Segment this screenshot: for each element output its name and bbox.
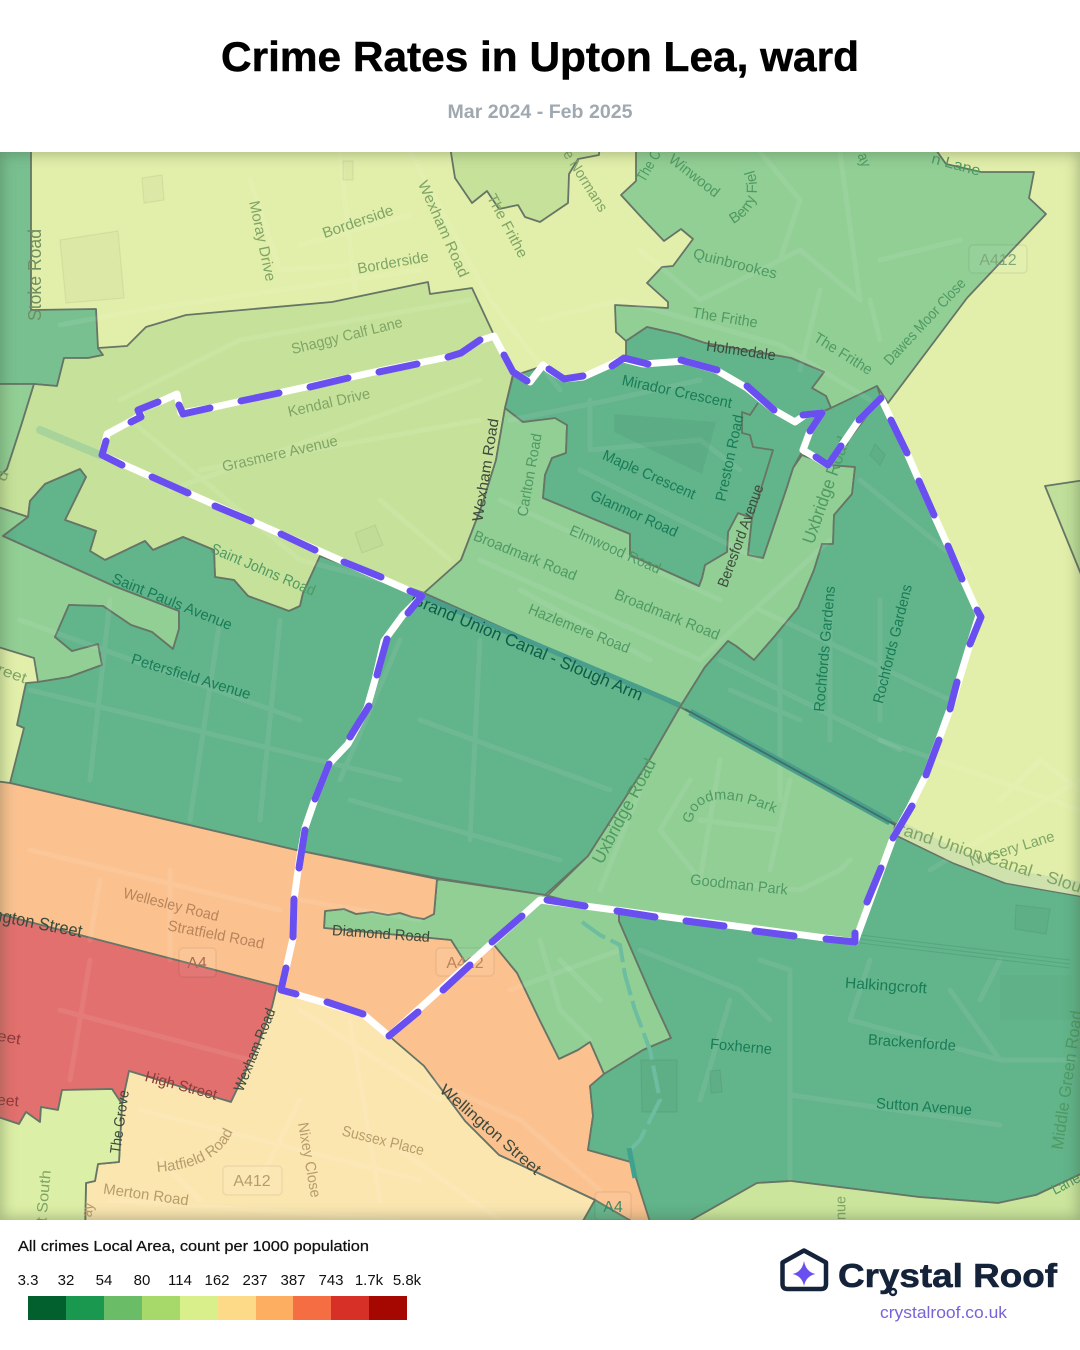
legend tick labels: 743 (318, 1272, 344, 1289)
zone: central-west dark green (3, 469, 680, 895)
legend tick labels (18, 1272, 422, 1289)
street and road name labels: Elmwood Road (567, 522, 663, 578)
street and road name labels: ay (854, 151, 875, 170)
street and road name labels: t South (33, 1169, 55, 1223)
zone: small wedge by Uxbridge Road (803, 386, 881, 465)
legend tick labels: 114 (168, 1272, 192, 1289)
street and road name labels: Preston Road (713, 413, 747, 503)
street and road name labels: Beresford Avenue (715, 482, 767, 590)
street and road name labels: rand Union Canal - Slou (896, 819, 1080, 897)
street and road name labels: e Normans (559, 147, 611, 215)
railway lines (860, 935, 1070, 968)
logo y-key ring (890, 1289, 896, 1295)
street and road name labels: The Frithe (691, 304, 759, 332)
street and road name labels: The C (633, 147, 665, 185)
legend colour bar (28, 1296, 407, 1320)
zone: High Street red (0, 913, 277, 1124)
street and road name labels: Mirador Crescent (620, 372, 734, 412)
street and road name labels: Kendal Drive (286, 385, 372, 421)
zone: Shaggy Calf and Grasmere (0, 282, 513, 611)
ward boundary: white casing and purple dashes (102, 336, 981, 1036)
street and road name labels: Saint Pauls Avenue (109, 570, 235, 634)
street and road name labels: Quinbrookes (691, 245, 779, 283)
legend tick labels: 80 (134, 1272, 150, 1289)
road number shields: A412 (446, 955, 484, 972)
legend tick labels: 237 (242, 1272, 268, 1289)
logo: house icon with star (782, 1250, 826, 1289)
street and road name labels: Broadmark Road (471, 528, 579, 584)
street and road name labels: Saint Johns Road (208, 540, 318, 600)
street and road name labels: The Frithe (483, 191, 531, 261)
road number shields (179, 245, 1027, 1220)
street and road name labels: High Street (143, 1068, 220, 1104)
street and road name labels: Stoke Road (25, 229, 45, 321)
street and road name labels: ay (78, 1201, 98, 1218)
street and road name labels: Berry Fiel (728, 170, 757, 224)
street and road name labels: nue (832, 1196, 850, 1220)
zone: Goodman Park mid-green (545, 707, 895, 942)
legend tick labels: 5.8k (393, 1272, 422, 1289)
legend tick labels: 162 (204, 1272, 230, 1289)
zone: Broadmark mid-green (424, 408, 855, 707)
street and road name labels: Merton Road (102, 1181, 190, 1209)
zone: top-middle Frithe fragment (450, 152, 600, 223)
zone: Preston Road internal boundary (742, 403, 773, 518)
zone: Mirador dark green (505, 327, 831, 586)
zone: Saint Pauls mid-green (0, 506, 179, 682)
legend tick labels: 32 (58, 1272, 74, 1289)
street and road name labels: Sussex Place (340, 1123, 426, 1159)
street and road name labels: Uxbridge Road (588, 755, 660, 867)
map background: pale low-crime area (0, 152, 1080, 894)
street and road name labels: Carlton Road (514, 432, 546, 518)
road number shields: A412 (979, 252, 1017, 269)
street and road name labels: Brackenforde (868, 1031, 956, 1055)
street and road name labels: Hazlemere Road (526, 601, 632, 657)
road number shields: A412 (233, 1173, 271, 1190)
street and road name labels: Grand Union Canal - Slough Arm (408, 589, 646, 705)
street and road name labels: Goodman Park (683, 790, 778, 822)
street and road name labels: Stratfield Road (166, 917, 266, 953)
road number shields: A4 (603, 1199, 623, 1216)
street and road name labels: Glanmor Road (588, 487, 680, 541)
zone: Halkingcroft dark green (588, 835, 1080, 1235)
zone: bottom-right light green (690, 1174, 1080, 1220)
zone: north Quinbrookes (615, 140, 1046, 408)
street and road name labels: Goodman Park (689, 871, 789, 899)
zone: Sussex Place cream (85, 986, 595, 1235)
street and road name labels: Nixey Close (294, 1121, 324, 1199)
street and road name labels: Borderside (320, 202, 396, 242)
zone: left mid-green sliver (0, 384, 34, 481)
street and road name labels: Hatfield Road (157, 1128, 232, 1172)
street and road name labels: Shaggy Calf Lane (290, 314, 404, 358)
street and road name labels: Wexham Road (469, 417, 503, 523)
legend title: All crimes Local Area, count per 1000 population (18, 1238, 369, 1255)
street and road name labels: Wexham Road (231, 1006, 279, 1094)
title: Crime Rates in Upton Lea, ward (221, 33, 859, 80)
legend (18, 1238, 422, 1320)
street and road name labels: Uxbridge Road (798, 434, 854, 546)
street and road name labels: Sutton Avenue (876, 1095, 972, 1119)
legend tick labels: 387 (280, 1272, 306, 1289)
street and road name labels: Halkingcroft (845, 975, 928, 997)
street and road name labels: Wellesley Road (121, 885, 221, 925)
logo wordmark: Crystal Roof (838, 1257, 1058, 1294)
street and road name labels: Dawes Moor Close (881, 275, 969, 369)
street and road name labels: Diamond Road (332, 922, 430, 946)
zone: bottom-left light green (0, 1089, 122, 1235)
street and road name labels: Rochfords Gardens (870, 583, 916, 705)
street and road name labels: Wexham Road (414, 178, 472, 280)
zone: Diamond Road mid-green (324, 879, 671, 1074)
street and road name labels: Moray Drive (245, 199, 279, 283)
road number shields: A4 (187, 955, 207, 972)
faint street network (20, 152, 1080, 1220)
street and road name labels: n Lane (930, 150, 982, 180)
zone: Rochfords dark green (680, 398, 979, 825)
street and road name labels: The Grove (107, 1089, 133, 1155)
zone: far-right light-green fragment (1045, 480, 1080, 584)
street and road name labels: Borderside (356, 248, 430, 278)
zone: far-left strip (0, 140, 103, 386)
street and road name labels: Maple Crescent (600, 447, 699, 503)
legend tick labels: 3.3 (18, 1272, 38, 1289)
street and road name labels: Wellington Street (436, 1082, 544, 1179)
street and road name labels: Holmedale (705, 338, 777, 364)
street and road name labels: Winwood (665, 151, 723, 201)
street and road name labels: Nursery Lane (967, 828, 1057, 870)
website url: crystalroof.co.uk (880, 1303, 1008, 1322)
street and road name labels: Petersfield Avenue (129, 651, 253, 703)
canal and stream water features (40, 430, 1080, 1178)
pitch outline (60, 231, 124, 303)
zone: small dark wedge at A4 (582, 1199, 631, 1220)
street and road name labels: Grasmere Avenue (221, 432, 339, 476)
street and road name labels: Broadmark Road (612, 586, 722, 644)
street and road name labels: Rochfords Gardens (811, 585, 839, 713)
legend tick labels: 54 (96, 1272, 112, 1289)
date subtitle: Mar 2024 - Feb 2025 (448, 102, 633, 123)
zone: Wellesley orange (0, 781, 655, 1235)
legend tick labels: 1.7k (355, 1272, 384, 1289)
street and road name labels: The Frithe (811, 329, 875, 379)
street and road name labels: Foxherne (709, 1036, 773, 1058)
map edge vignette (0, 152, 1080, 1220)
